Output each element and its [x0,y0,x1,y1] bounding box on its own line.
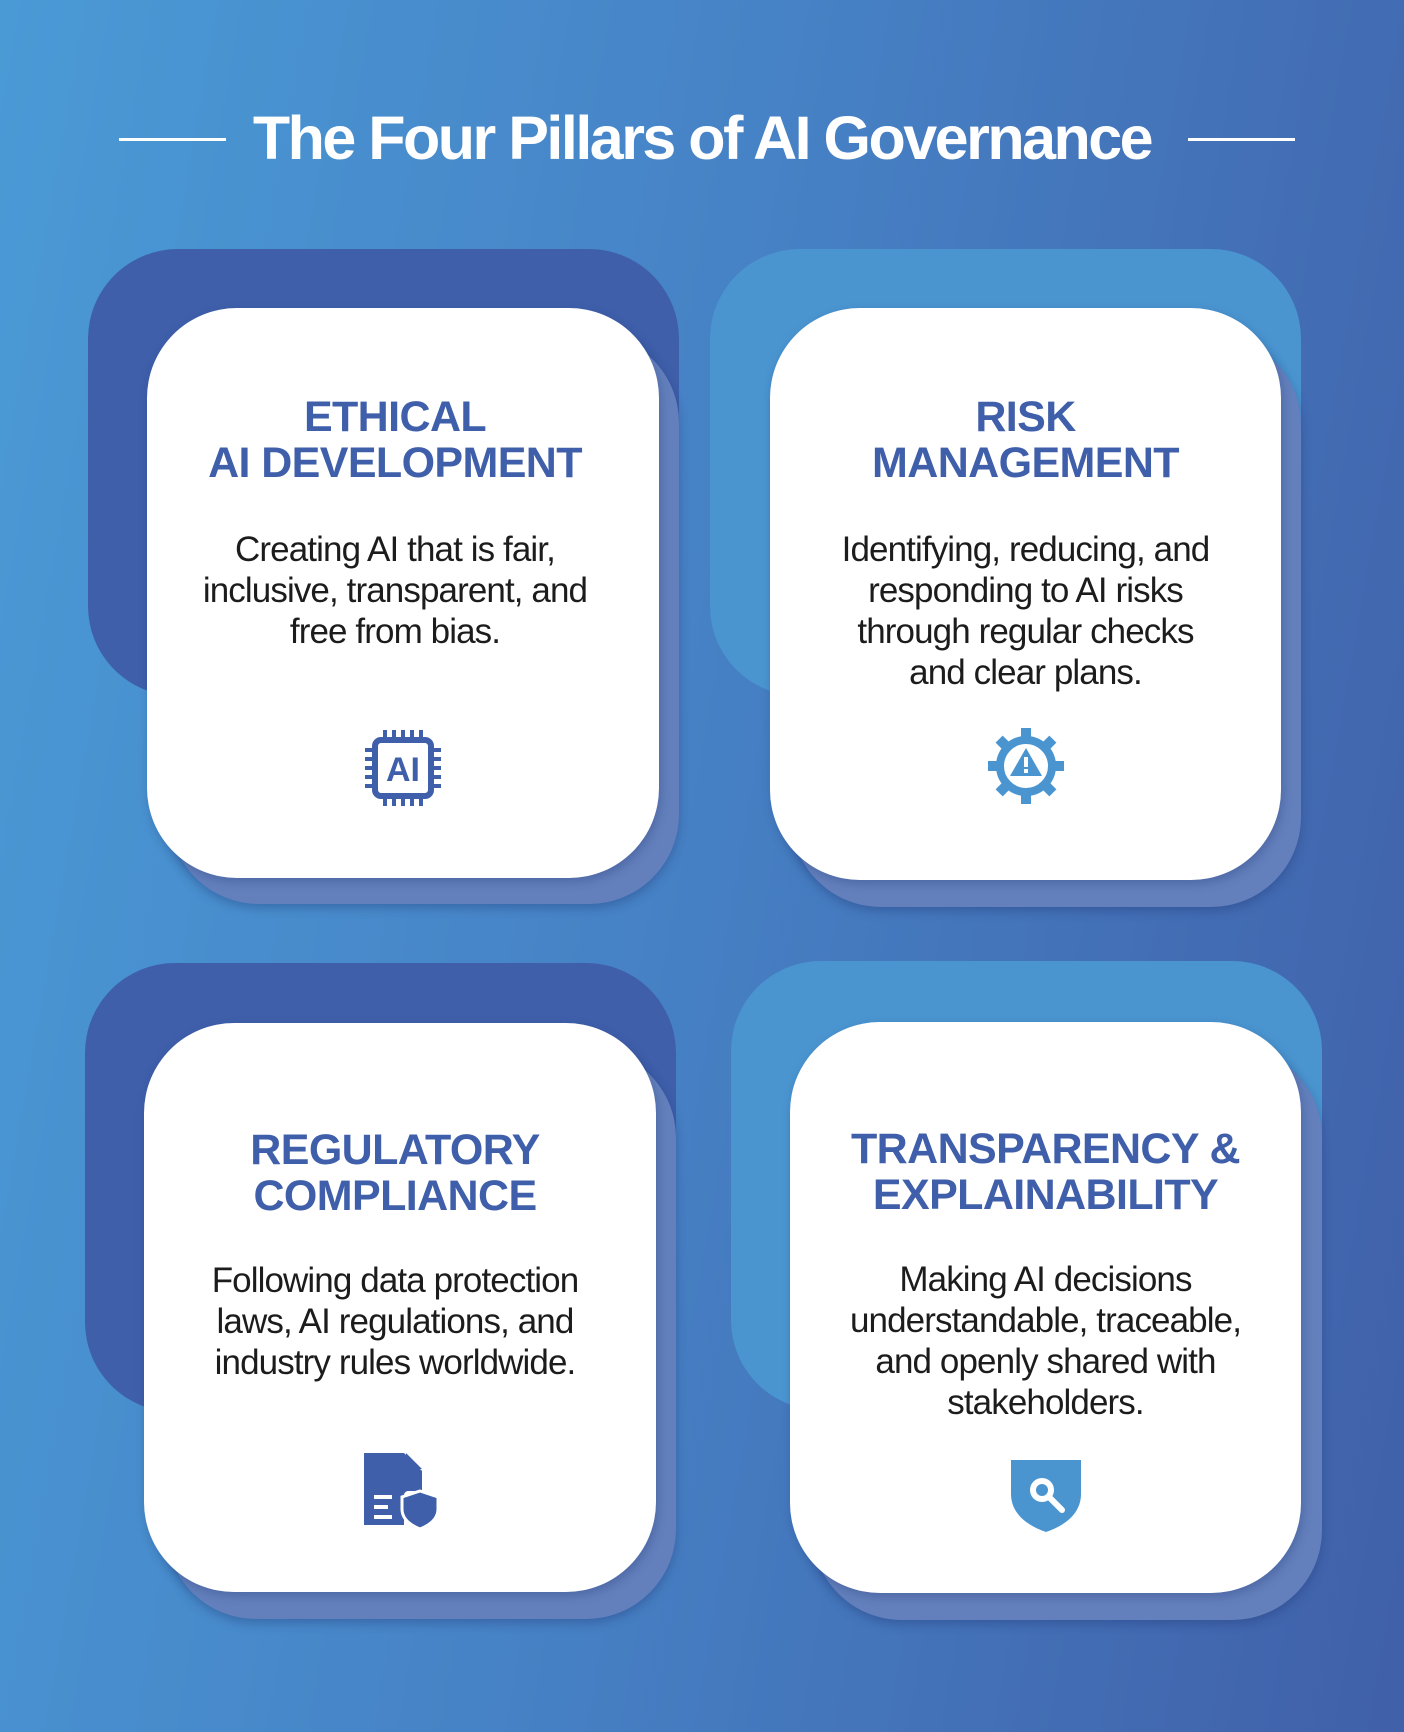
icon: gear warning [988,728,1064,804]
text: ethical description: free from bias. [290,612,500,651]
text: risk description: responding to AI risks [868,571,1183,610]
heading: ethical AI development [208,393,582,487]
heading: transparency & explainability [851,1125,1240,1219]
icon: shield magnifier [1011,1460,1081,1532]
text: risk description: and clear plans. [909,653,1142,692]
heading: transparency & explainability: EXPLAINABILITY [873,1171,1218,1219]
heading: regulatory compliance: REGULATORY [250,1126,540,1174]
heading: ethical AI development: ETHICAL [304,393,486,441]
title: The Four Pillars of AI Governance [253,104,1151,172]
panel: regulatory compliance [85,963,679,1626]
text: transparency description: and openly shared with [875,1342,1216,1381]
text: risk description: Identifying, reducing, and [842,530,1209,569]
text: compliance description: Following data protection [212,1261,578,1300]
heading: transparency & explainability: TRANSPARENCY & [851,1125,1240,1173]
text: compliance description [212,1261,578,1382]
text: risk description: through regular checks [857,612,1194,651]
heading: risk management: MANAGEMENT [872,439,1179,487]
heading: risk management: RISK [975,393,1076,441]
icon: document shield [364,1453,436,1528]
text: compliance description: laws, AI regulations, and [217,1302,573,1341]
heading: risk management [872,393,1180,487]
icon: AI chip: AI [386,751,420,789]
heading: regulatory compliance [250,1126,540,1220]
panel: risk management [710,249,1304,914]
panel: ethical AI development [88,249,682,912]
text: transparency description: Making AI decisions [899,1260,1192,1299]
text: ethical description [203,530,587,651]
icon: AI chip [365,730,441,806]
text: transparency description: understandable, traceable, [850,1301,1241,1340]
heading: regulatory compliance: COMPLIANCE [253,1172,537,1220]
text: risk description [842,530,1209,692]
text: transparency description: stakeholders. [947,1383,1144,1422]
text: ethical description: inclusive, transparent, and [203,571,587,610]
text: compliance description: industry rules worldwide. [215,1343,575,1382]
text: ethical description: Creating AI that is fair, [235,530,555,569]
heading: ethical AI development: AI DEVELOPMENT [208,439,582,487]
panel: transparency & explainability [731,961,1324,1627]
text: transparency description [850,1260,1241,1422]
